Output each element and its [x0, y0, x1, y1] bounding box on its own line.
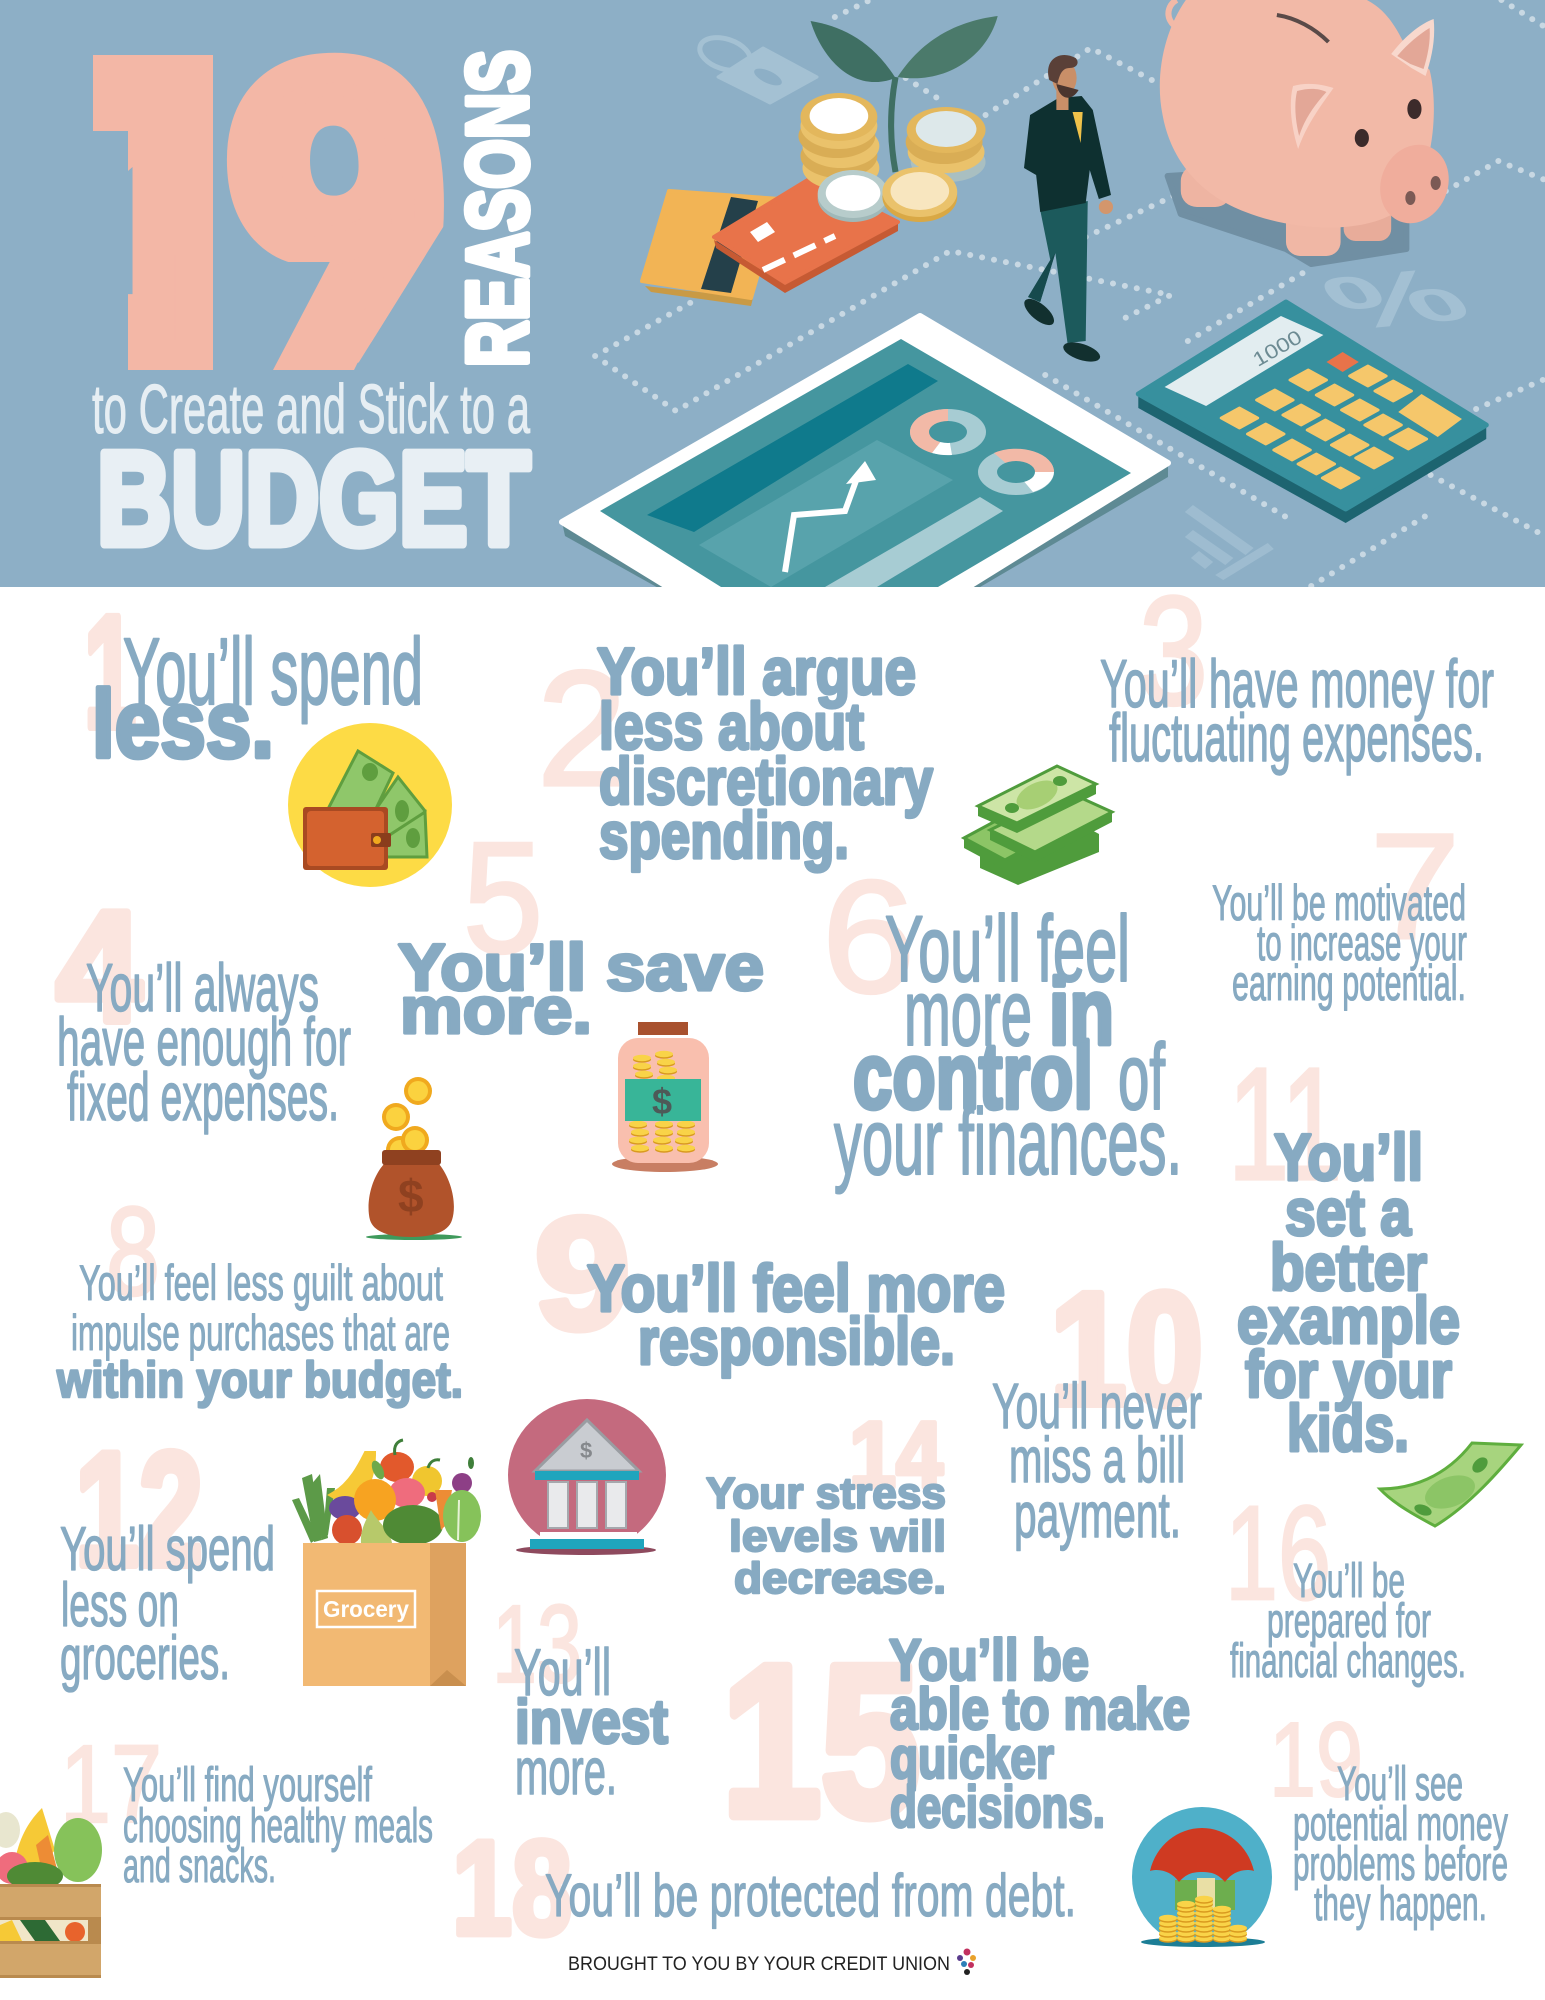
- text: You’ll never: [992, 1370, 1202, 1442]
- orange credit card: [714, 178, 898, 293]
- text: You’ll spend: [60, 1515, 275, 1584]
- text: You’ll see: [1337, 1758, 1463, 1811]
- text: [92, 619, 423, 778]
- text: You’ll find yourself: [123, 1759, 372, 1812]
- title block: [80, 0, 546, 572]
- text: You’ll feel more: [587, 1251, 1005, 1325]
- reason 4: [56, 879, 351, 1135]
- reason 18: [452, 1814, 1076, 1963]
- foreground objects: [798, 0, 1460, 365]
- right coin stack: [906, 107, 986, 182]
- text: You’ll be protected from debt.: [545, 1862, 1076, 1929]
- text: quicker: [890, 1726, 1054, 1791]
- number 11: 11: [1228, 1034, 1342, 1213]
- text: kids.: [1287, 1391, 1409, 1465]
- reason 6: [822, 847, 1182, 1194]
- text: [1100, 646, 1494, 776]
- text: discretionary: [599, 744, 933, 818]
- front coins: [818, 167, 957, 222]
- text: [60, 1515, 275, 1693]
- reason 3: [1100, 564, 1494, 776]
- left coin stack: [798, 93, 879, 190]
- text: invest: [515, 1688, 668, 1757]
- reason 12: [60, 1419, 275, 1693]
- text: more: [904, 960, 1032, 1065]
- number 17: 17: [60, 1723, 162, 1846]
- icon: flying dollar bill: [1380, 1443, 1521, 1526]
- text: You’ll always: [86, 950, 319, 1026]
- bag label: [317, 1591, 415, 1627]
- piggy bank: [1160, 0, 1460, 264]
- donut chart one: [910, 409, 986, 455]
- text: [398, 930, 764, 1047]
- text: You’ll be: [889, 1628, 1089, 1693]
- number 1: 1: [84, 582, 136, 761]
- number 8: 8: [106, 1181, 160, 1322]
- text: [123, 1759, 433, 1893]
- icon: stack of bills: [964, 766, 1112, 885]
- tablet with charts: [562, 316, 1168, 590]
- text: levels will: [729, 1512, 946, 1561]
- text: better: [1270, 1230, 1427, 1304]
- text: prepared for: [1267, 1595, 1431, 1648]
- text: [889, 1628, 1190, 1840]
- number 14: 14: [849, 1402, 943, 1507]
- icon: credit union logo: [957, 1948, 976, 1975]
- number 2: 2: [537, 637, 627, 820]
- text: decrease.: [734, 1554, 946, 1603]
- reason 7: [1212, 802, 1467, 1011]
- number 6: 6: [822, 847, 915, 1026]
- text: groceries.: [60, 1624, 230, 1693]
- number 12: 12: [75, 1419, 203, 1600]
- text: You’ll: [1274, 1120, 1423, 1194]
- text: less about: [599, 689, 864, 763]
- text: of: [1118, 1024, 1166, 1129]
- text: [1237, 1120, 1460, 1465]
- text: miss a bill: [1009, 1424, 1185, 1496]
- text: fixed expenses.: [67, 1059, 339, 1135]
- text: You’ll save: [398, 930, 764, 1004]
- icon: savings jar: [612, 1022, 718, 1172]
- icon: bank building: [508, 1399, 666, 1555]
- text: impulse purchases that are: [71, 1305, 450, 1361]
- text: [57, 950, 351, 1135]
- reason 2: [537, 634, 933, 872]
- number 9: 9: [535, 1186, 630, 1362]
- text: set a: [1285, 1175, 1412, 1249]
- calculator: [1138, 302, 1486, 523]
- header banner background: [0, 0, 1545, 587]
- text: choosing healthy meals: [123, 1800, 433, 1853]
- text: within your budget.: [56, 1352, 463, 1408]
- text: Your stress: [706, 1469, 946, 1518]
- text: You’ll be: [1293, 1555, 1405, 1608]
- plant sprout: [811, 16, 998, 172]
- text: [514, 1635, 668, 1808]
- yellow credit card: [642, 191, 780, 306]
- text: [597, 634, 933, 872]
- icon: grocery bag: [292, 1440, 481, 1686]
- number 5: 5: [463, 810, 543, 986]
- text: You’ll spend: [123, 619, 423, 725]
- text: able to make: [890, 1677, 1190, 1742]
- text: responsible.: [638, 1304, 955, 1378]
- icon: money bag with coins: $: [398, 1170, 424, 1222]
- number 10: 10: [1050, 1259, 1203, 1438]
- icon: money bag with coins: [366, 1077, 462, 1240]
- text: You’ll feel: [885, 896, 1130, 1001]
- text: in: [1049, 959, 1114, 1064]
- icon: bank building: $: [580, 1438, 592, 1463]
- text: [56, 1255, 463, 1408]
- text: [1212, 875, 1467, 1011]
- text: payment.: [1014, 1479, 1181, 1551]
- dotted connector lines: [595, 0, 1545, 586]
- text: more.: [400, 973, 592, 1047]
- reason 13: [492, 1583, 668, 1808]
- donut chart two: [978, 449, 1054, 495]
- reason 1: [84, 582, 423, 778]
- header illustration: [562, 0, 1545, 590]
- text: You’ll feel less guilt about: [79, 1255, 443, 1311]
- text: your finances.: [834, 1089, 1182, 1194]
- text: have enough for: [57, 1004, 351, 1080]
- reason 19: [1269, 1701, 1508, 1931]
- text: You’ll: [514, 1635, 611, 1709]
- number 19: 19: [1269, 1701, 1363, 1819]
- subtitle: to Create and Stick to a: [92, 370, 530, 448]
- text: less.: [92, 671, 274, 778]
- faint bar chart icon: [1185, 505, 1274, 580]
- number 13: 13: [492, 1583, 582, 1706]
- text: [834, 896, 1182, 1194]
- icon: umbrella over savings: [1132, 1807, 1272, 1947]
- text: more.: [515, 1734, 617, 1808]
- text: decisions.: [890, 1775, 1105, 1840]
- reason 16: [1225, 1479, 1466, 1688]
- big number 19: [80, 0, 444, 466]
- number 3: 3: [1139, 564, 1208, 737]
- text: [992, 1370, 1202, 1551]
- icon: crate of vegetables: [0, 1808, 102, 1978]
- text: spending.: [599, 798, 849, 872]
- icon: savings jar: $: [652, 1081, 672, 1122]
- text: You’ll argue: [597, 634, 916, 708]
- text: and snacks.: [123, 1840, 276, 1893]
- reason 8: [56, 1181, 463, 1408]
- calculator: 1000: [1249, 327, 1306, 371]
- number 15: 15: [722, 1620, 920, 1861]
- reason 10: [992, 1259, 1203, 1551]
- text: [1230, 1555, 1466, 1688]
- vegetables: [292, 1440, 481, 1545]
- businessman walking: [1020, 55, 1113, 365]
- number 7: 7: [1370, 802, 1460, 970]
- footer credit: BROUGHT TO YOU BY YOUR CREDIT UNION: [568, 1953, 950, 1975]
- reason 15: [722, 1620, 1190, 1861]
- text: less on: [61, 1571, 179, 1640]
- text: [706, 1469, 946, 1603]
- word BUDGET: BUDGET: [97, 425, 530, 572]
- number 16: 16: [1225, 1479, 1331, 1628]
- text: for your: [1245, 1337, 1452, 1411]
- text: control: [853, 1023, 1093, 1128]
- reason 5: [398, 810, 764, 1047]
- text: example: [1237, 1283, 1460, 1357]
- number 4: 4: [56, 879, 142, 1055]
- reason 17: [60, 1723, 433, 1893]
- text: [587, 1251, 1005, 1378]
- reason 11: [1228, 1034, 1460, 1465]
- faint lock icon: [696, 32, 817, 103]
- faint percent symbol: %: [1302, 253, 1490, 346]
- icon: wallet with cash: [288, 723, 452, 887]
- ground details: [595, 0, 1545, 586]
- text: [1293, 1758, 1508, 1931]
- reason 9: [535, 1186, 1005, 1378]
- reason 14: [706, 1402, 946, 1603]
- number 18: 18: [452, 1814, 572, 1963]
- icon: grocery bag: Grocery: [323, 1596, 409, 1622]
